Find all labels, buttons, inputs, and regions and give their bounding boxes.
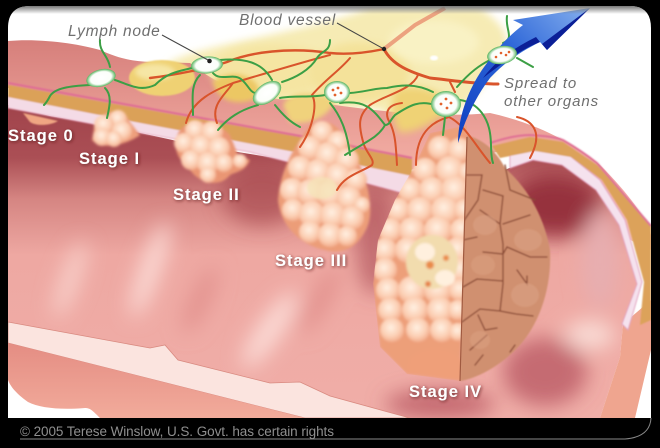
tumor: stage 0 — [23, 113, 58, 125]
right wall pink edge — [490, 135, 651, 226]
label: stage I: Stage I — [79, 150, 140, 168]
upper colon wall bands — [8, 83, 651, 330]
label: stage II: Stage II — [173, 186, 240, 204]
node: plain — [86, 68, 116, 88]
lumen folds and shading — [48, 165, 618, 418]
muscle orange band — [8, 85, 412, 176]
tumor: stage III — [278, 121, 370, 252]
leader line: blood vessel — [337, 23, 384, 49]
tumor: stage II — [174, 120, 250, 183]
pink edge line — [8, 83, 412, 158]
node: with cancer cells centre — [431, 91, 461, 117]
lymph vessels — [44, 16, 533, 163]
label: lymph node: Lymph node — [68, 23, 161, 40]
cut section cells — [462, 165, 547, 365]
node: with cancer cells — [324, 81, 350, 103]
leader line: lymph node — [162, 35, 208, 60]
fat tissue behind colon — [168, 8, 510, 115]
fat lobes — [129, 20, 479, 133]
right wall white band — [510, 150, 642, 330]
tumor: stage IV surface — [373, 126, 467, 381]
lower outer surface — [8, 343, 305, 418]
vessel branch point — [382, 47, 386, 51]
label: spread to other organs: Spread to — [504, 75, 577, 92]
label: spread to other organs: other organs — [504, 93, 599, 110]
node: over the arrow — [487, 46, 517, 64]
lower colon wall strip — [8, 322, 410, 418]
arrow: spread to other organs — [458, 8, 590, 143]
bottom frame line — [20, 418, 651, 439]
copyright credit: © 2005 Terese Winslow, U.S. Govt. has certain rights — [20, 424, 334, 439]
top edge shading — [8, 6, 651, 14]
node: plain lower — [252, 81, 282, 105]
colon outer surface — [8, 40, 651, 250]
label: stage III: Stage III — [275, 252, 347, 270]
tumor cut line — [460, 137, 467, 381]
label: stage 0: Stage 0 — [8, 127, 74, 145]
tumor: stage I — [92, 110, 140, 147]
label: stage IV: Stage IV — [409, 383, 482, 401]
tumor: stage IV cut section — [460, 135, 550, 381]
label: blood vessel: Blood vessel — [239, 12, 336, 29]
colon lumen interior — [8, 105, 638, 418]
lymph nodes — [84, 8, 590, 143]
blood vessels — [150, 8, 536, 190]
right outer wall — [600, 300, 651, 418]
right wall orange band — [492, 137, 651, 325]
node: labelled — [191, 56, 223, 74]
mucosa white band — [8, 96, 410, 195]
